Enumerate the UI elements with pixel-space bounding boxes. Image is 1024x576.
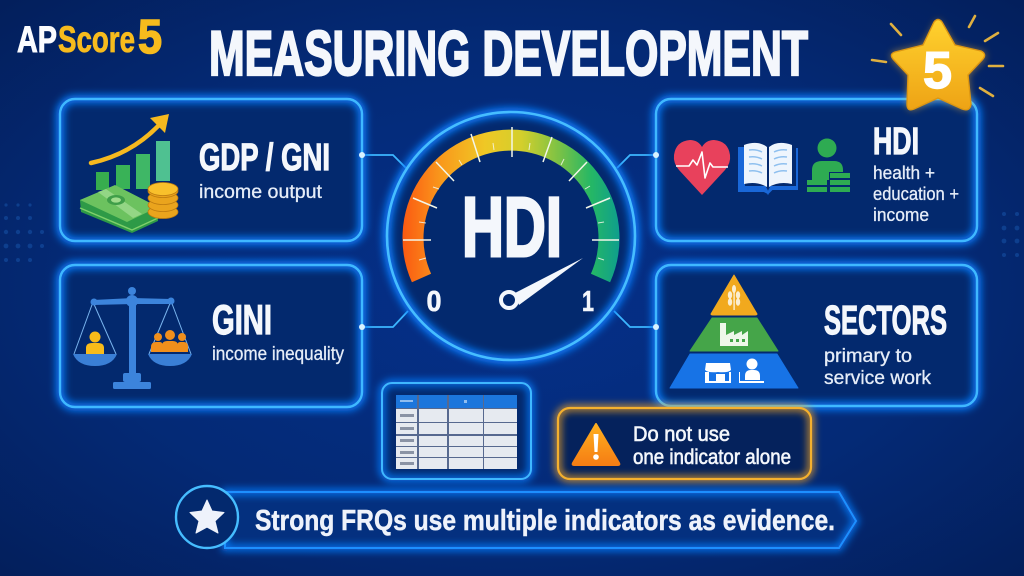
star badge: 5: 5 (923, 42, 952, 100)
panel: data table (382, 383, 531, 479)
panel: GDP / GNI (60, 99, 362, 241)
callout: warning (558, 408, 811, 479)
text: health + education + income: education + (873, 184, 959, 204)
banner: key takeaway (176, 486, 856, 548)
icon: person with income stacks (807, 138, 850, 192)
text: income inequality: income inequality (212, 344, 344, 365)
text: health + education + income (873, 163, 959, 225)
gauge label: 0: 0 (426, 286, 442, 318)
table graphic (396, 395, 517, 469)
connectors: gauge to panels (362, 155, 656, 327)
logo: APScore5: 5 (138, 11, 162, 64)
text: warning message: one indicator alone (633, 446, 791, 469)
heading: HDI: HDI (873, 121, 919, 163)
star rays (872, 16, 1003, 96)
gauge: HDI (387, 112, 635, 360)
icon: star circle (176, 486, 238, 548)
icon: open book (739, 143, 797, 193)
decorative dots left (4, 203, 44, 262)
gauge needle (501, 258, 583, 308)
icon: money, growth bars and arrow (80, 114, 178, 233)
icon: balance scale with people (73, 287, 192, 389)
logo: APScore5: Score (58, 19, 135, 60)
star badge: 5 (872, 16, 1003, 110)
panel: SECTORS (656, 265, 977, 406)
gauge colour arc (413, 140, 609, 278)
gauge label: HDI: HDI (462, 180, 562, 274)
text: takeaway: Strong FRQs use multiple indicators as evidence. (255, 505, 835, 537)
logo: APScore5 (17, 11, 162, 64)
text: health + education + income: health + (873, 163, 935, 183)
panel: HDI (656, 99, 977, 241)
text: primary to service work: service work (824, 368, 932, 389)
gauge ticks (403, 127, 619, 260)
text: income output: income output (199, 182, 323, 203)
text: warning message (633, 423, 791, 469)
logo: APScore5: AP (17, 19, 57, 60)
icon: sector pyramid (670, 275, 798, 388)
text: primary to service work: primary to (824, 346, 912, 367)
gauge label: 1: 1 (582, 286, 594, 318)
decorative dots right (1002, 212, 1019, 257)
heading: GDP / GNI: GDP / GNI (199, 137, 330, 179)
icon: heart (674, 140, 730, 195)
heading: GINI: GINI (212, 296, 272, 343)
connector dots (359, 152, 659, 330)
heading: SECTORS: SECTORS (824, 297, 947, 343)
icon: warning triangle (573, 424, 619, 465)
text: warning message: Do not use (633, 423, 730, 446)
panel: GINI (60, 265, 362, 407)
text: primary to service work (824, 346, 932, 389)
text: health + education + income: income (873, 205, 929, 225)
